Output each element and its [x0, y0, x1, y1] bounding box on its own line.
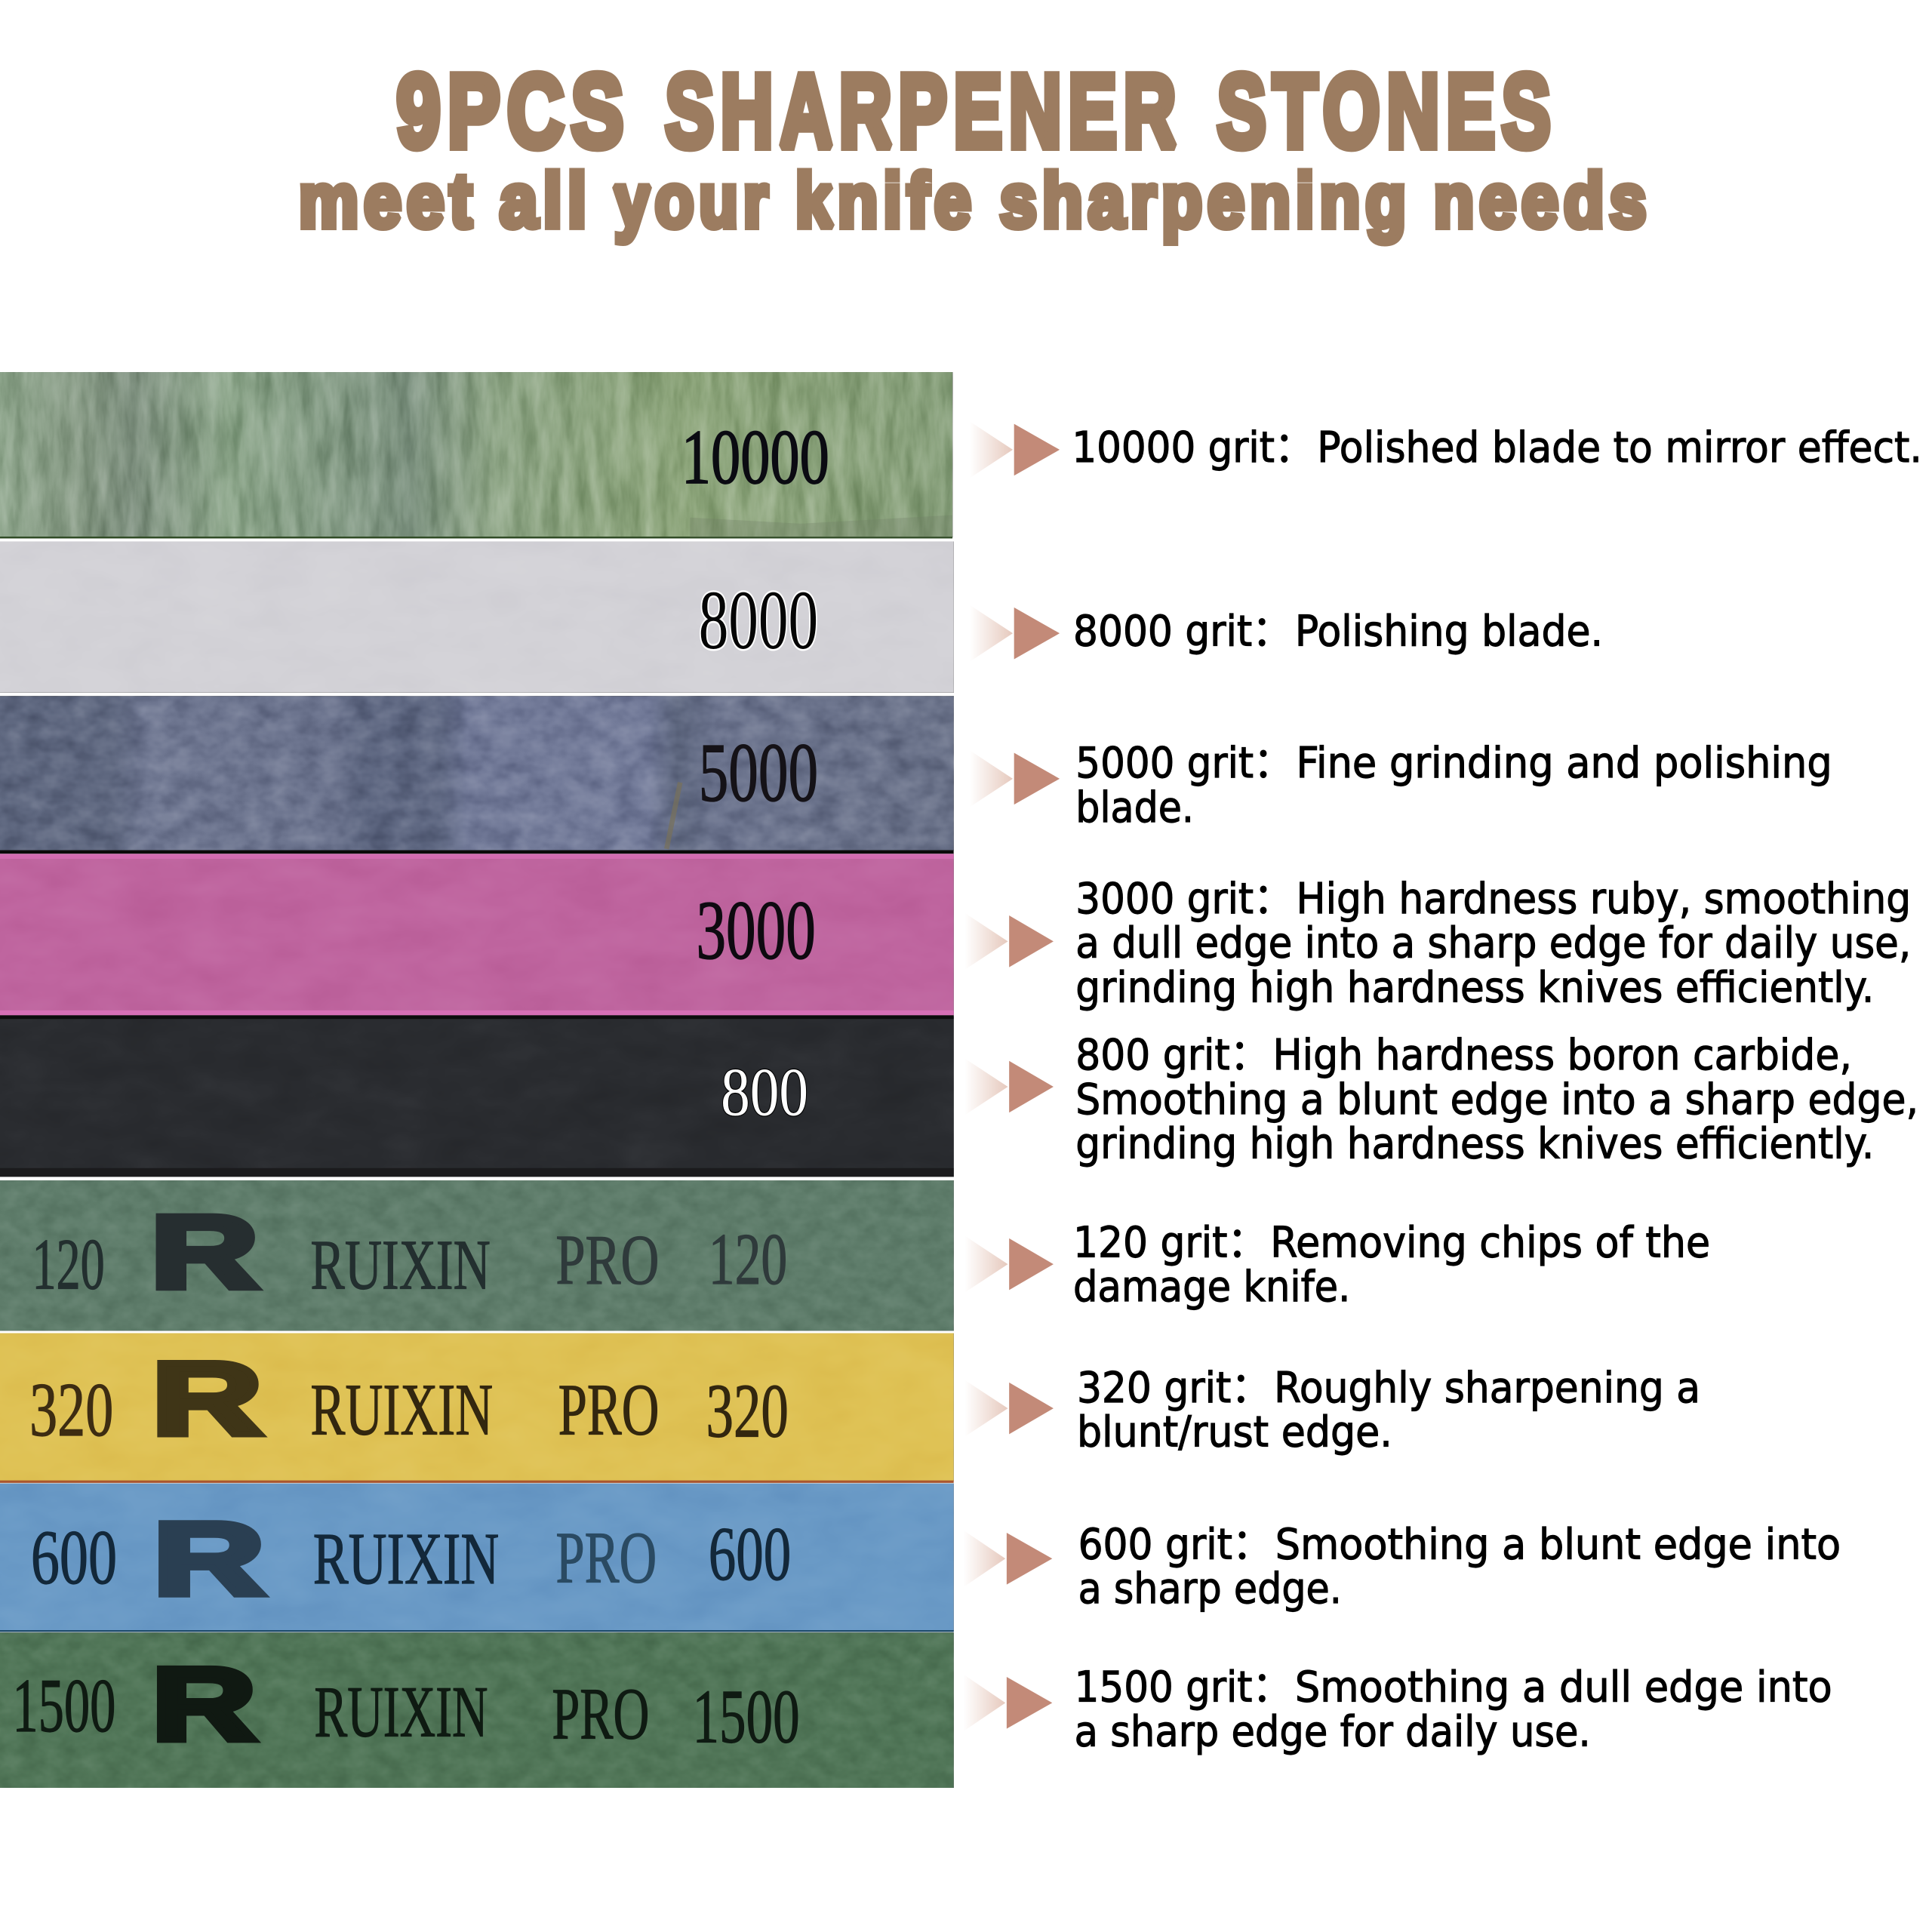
description: 10000 grit: 10000 grit： — [1072, 423, 1313, 472]
stone: 600 grit: RUIXIN — [313, 1518, 499, 1600]
stone: 600 grit: PRO — [555, 1517, 657, 1598]
stone: 120 grit: 120 — [32, 1224, 105, 1305]
subtitle: knife — [795, 158, 977, 243]
description: 120 grit — [1073, 1218, 1710, 1312]
stone: 1500 grit: R — [152, 1647, 257, 1762]
stone: 800 grit: 800 — [721, 1054, 808, 1131]
title: SHARPENER — [666, 54, 1183, 169]
stone: 320 grit: PRO — [558, 1369, 659, 1451]
stone: 800 grit — [0, 1015, 954, 1177]
stone: 600 grit — [0, 1484, 954, 1632]
description: 1500 grit: a sharp edge for daily use. — [1075, 1707, 1591, 1756]
title: STONES — [1217, 54, 1558, 169]
stone: 1500 grit: 1500 — [693, 1675, 800, 1759]
stone: 1500 grit: PRO — [552, 1674, 649, 1755]
description: 320 grit — [1077, 1364, 1700, 1457]
description: 8000 grit — [1073, 608, 1603, 657]
description: 5000 grit — [1075, 739, 1832, 832]
subtitle: sharpening — [1000, 158, 1411, 243]
description: 320 grit: 320 grit： — [1077, 1364, 1270, 1413]
stone: 3000 grit: 3000 — [696, 884, 816, 977]
arrow: 800 grit — [964, 1058, 1054, 1115]
stone: 120 grit: 120 — [709, 1219, 787, 1300]
stone: 1500 grit: 1500 — [12, 1663, 115, 1748]
stone: 5000 grit: 5000 — [699, 727, 818, 820]
description: 120 grit: 120 grit： — [1073, 1218, 1266, 1267]
arrow: 10000 grit — [970, 421, 1060, 478]
description: 1500 grit: Smoothing a dull edge into — [1295, 1663, 1832, 1712]
stone: 320 grit: 320 — [706, 1369, 789, 1454]
description: 1500 grit — [1075, 1663, 1832, 1756]
stone: 10000 grit: 10000 — [681, 414, 829, 500]
description: 600 grit: 600 grit： — [1078, 1520, 1272, 1569]
arrow: 120 grit — [964, 1236, 1054, 1293]
description: 5000 grit: Fine grinding and polishing — [1297, 739, 1832, 788]
arrow: 1500 grit — [964, 1675, 1052, 1731]
description: 800 grit: grinding high hardness knives efficiently. — [1075, 1120, 1874, 1169]
arrow: 8000 grit — [970, 605, 1060, 662]
stone: 8000 grit — [0, 542, 954, 693]
description: 320 grit: blunt/rust edge. — [1077, 1408, 1392, 1457]
arrow: 5000 grit — [970, 750, 1060, 807]
stone: 320 grit: RUIXIN — [310, 1369, 493, 1451]
description: 800 grit — [1075, 1031, 1918, 1169]
stone: 120 grit: PRO — [555, 1221, 659, 1300]
stone: 5000 grit — [0, 696, 954, 851]
stone: 600 grit: 600 — [709, 1512, 791, 1596]
stone: 1500 grit: RUIXIN — [314, 1671, 488, 1752]
description: 5000 grit: blade. — [1075, 783, 1194, 832]
description: 600 grit — [1078, 1520, 1841, 1614]
subtitle: all — [500, 158, 592, 243]
subtitle: your — [614, 158, 773, 243]
arrow: 3000 grit — [964, 913, 1054, 970]
description: 120 grit: damage knife. — [1073, 1263, 1350, 1312]
stone: 10000 grit — [0, 372, 952, 538]
description: 5000 grit: 5000 grit： — [1075, 739, 1293, 788]
stone: 320 grit: 320 — [29, 1367, 113, 1452]
description: 3000 grit — [1075, 875, 1911, 1012]
stone: 120 grit — [0, 1180, 954, 1331]
stone: 320 grit — [0, 1334, 954, 1483]
description: 800 grit: High hardness boron carbide, — [1273, 1031, 1852, 1080]
stone: 1500 grit — [0, 1632, 954, 1788]
title — [397, 54, 1558, 169]
stone: 600 grit: 600 — [31, 1515, 117, 1601]
description: 320 grit: Roughly sharpening a — [1274, 1364, 1700, 1413]
stone: 600 grit: R — [152, 1502, 265, 1617]
description: 600 grit: Smoothing a blunt edge into — [1275, 1520, 1841, 1569]
description: 3000 grit: 3000 grit： — [1075, 875, 1293, 924]
description: 800 grit: 800 grit： — [1075, 1031, 1269, 1080]
description: 120 grit: Removing chips of the — [1270, 1218, 1710, 1267]
arrow: 600 grit — [964, 1531, 1052, 1587]
subtitle: meet — [299, 158, 478, 243]
stone: 120 grit: R — [150, 1195, 259, 1310]
subtitle — [299, 158, 1652, 243]
description: 8000 grit: 8000 grit： — [1073, 608, 1291, 657]
stone: 320 grit: R — [152, 1341, 263, 1457]
description: 3000 grit: grinding high hardness knives efficiently. — [1075, 963, 1874, 1012]
stone: 8000 grit: 8000 — [699, 574, 818, 667]
stone: 3000 grit — [0, 851, 954, 1017]
description: 600 grit: a sharp edge. — [1078, 1564, 1342, 1614]
arrow: 320 grit — [964, 1380, 1054, 1437]
title: 9PCS — [397, 54, 631, 169]
description: 1500 grit: 1500 grit： — [1075, 1663, 1291, 1712]
stone: 120 grit: RUIXIN — [310, 1226, 491, 1305]
description: 8000 grit: Polishing blade. — [1295, 608, 1603, 657]
subtitle: needs — [1434, 158, 1652, 243]
